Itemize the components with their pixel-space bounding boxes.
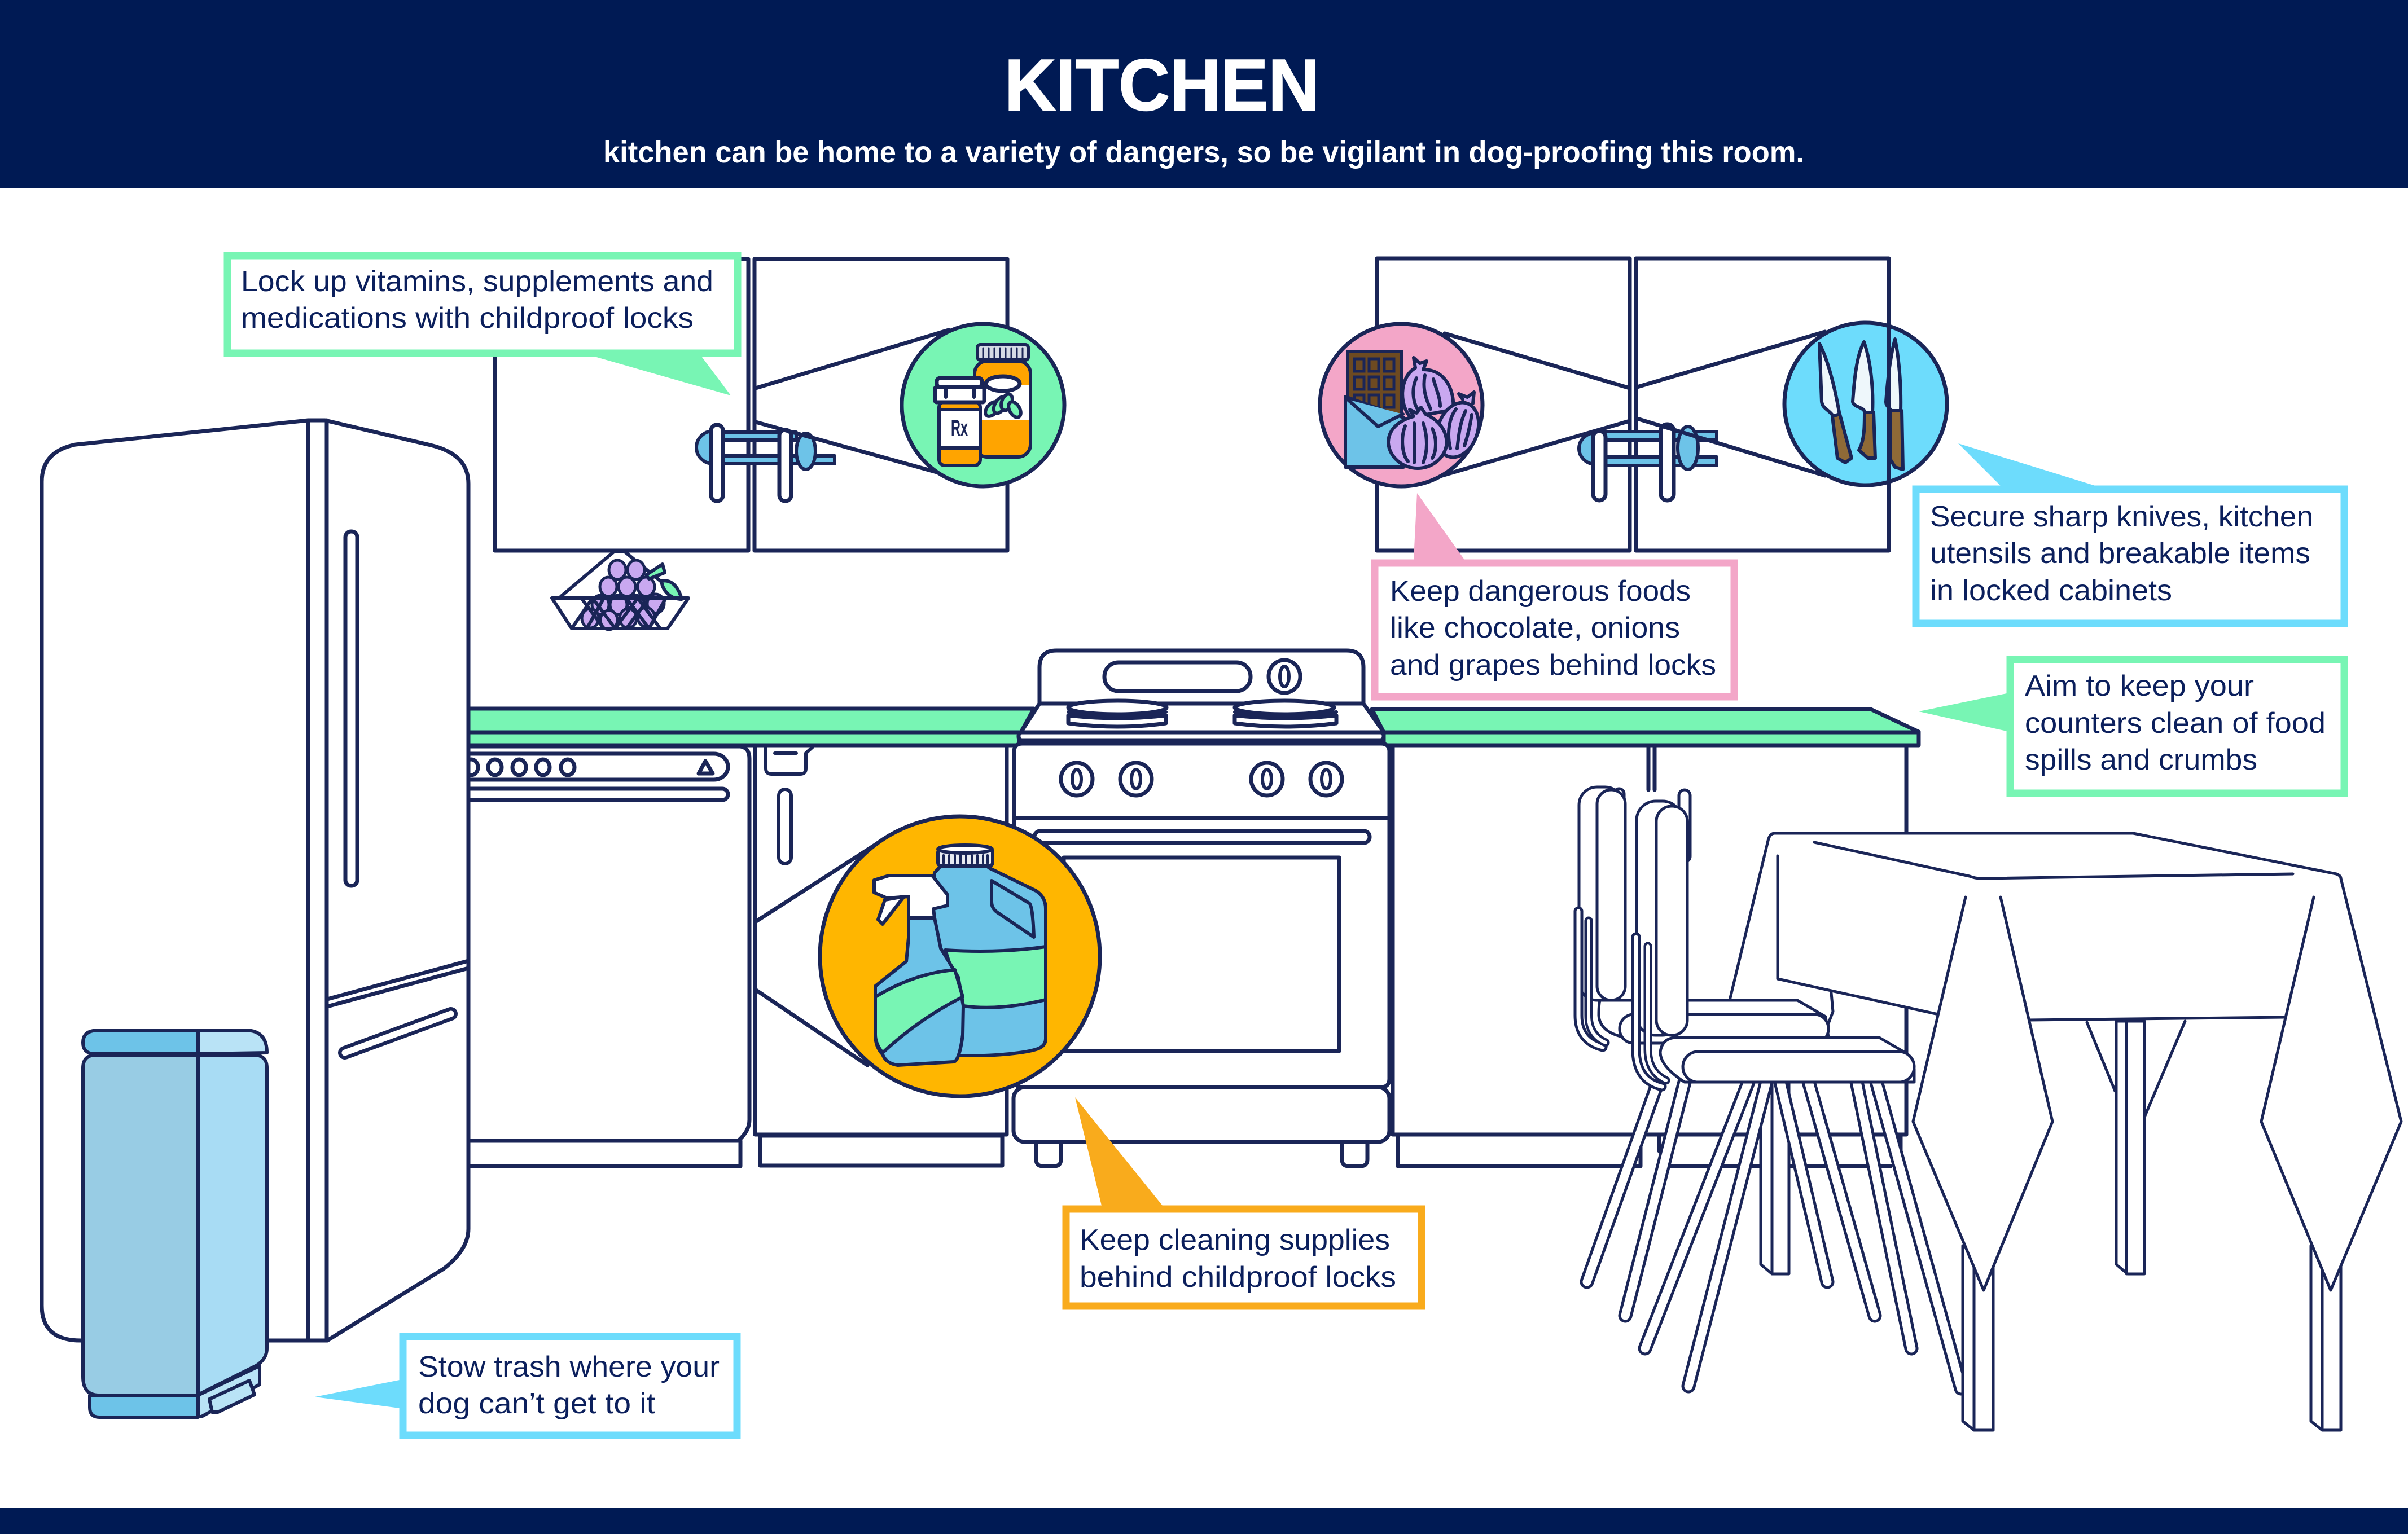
spray bottle bbox=[874, 876, 963, 1065]
stove bbox=[1014, 650, 1389, 1166]
front chair bbox=[1636, 790, 1914, 1087]
stool legs bbox=[1587, 1082, 1961, 1388]
table legs bbox=[2087, 1021, 2341, 1430]
callout: sharp knives: utensils and breakable items bbox=[1930, 537, 2310, 570]
callout: sharp knives bbox=[1916, 443, 2344, 623]
callout: counters bbox=[1919, 660, 2344, 793]
freezer handle bbox=[345, 1014, 451, 1053]
callout: lock up vitamins: medications with childproof locks bbox=[241, 302, 694, 335]
callout: trash: dog can’t get to it bbox=[418, 1387, 656, 1420]
small Rx bottle bbox=[935, 378, 984, 465]
callout: dangerous foods: Keep dangerous foods bbox=[1390, 575, 1691, 608]
callout: sharp knives: Secure sharp knives, kitchen bbox=[1930, 500, 2313, 533]
callout: dangerous foods: and grapes behind locks bbox=[1390, 649, 1716, 682]
basket frame bbox=[552, 598, 688, 628]
zoom lines: medications bbox=[756, 330, 949, 475]
callout: dangerous foods bbox=[1375, 493, 1734, 697]
backguard bbox=[1039, 650, 1363, 704]
callout: counters: spills and crumbs bbox=[2025, 744, 2257, 776]
tablecloth front drape and front leg bbox=[1913, 897, 2052, 1430]
dishwasher bbox=[464, 746, 749, 1166]
callout: trash: Stow trash where your bbox=[418, 1351, 720, 1383]
callout: cleaning supplies: Keep cleaning supplies bbox=[1080, 1224, 1390, 1256]
sink cabinet bbox=[755, 746, 1007, 1166]
childproof lock right bbox=[1579, 424, 1717, 500]
knobs bbox=[1061, 763, 1342, 795]
cooktop bbox=[1019, 701, 1384, 740]
counter right bbox=[1372, 709, 1919, 745]
fridge bbox=[42, 420, 468, 1340]
icon: knives circle bbox=[1784, 323, 1947, 485]
drawer and feet bbox=[1014, 1087, 1389, 1166]
counter left bbox=[468, 709, 1034, 745]
door edge through circle bbox=[1887, 324, 1891, 484]
callout: trash bbox=[315, 1337, 737, 1435]
lid bbox=[83, 1031, 198, 1054]
childproof lock left bbox=[696, 425, 835, 501]
grapes bbox=[582, 560, 664, 630]
back chair bbox=[1578, 787, 1828, 1047]
upper cabinets right bbox=[1377, 258, 1889, 551]
knife one bbox=[1819, 344, 1852, 463]
callout: cleaning supplies bbox=[1066, 1097, 1422, 1306]
icon: medication bottles circle bbox=[902, 324, 1064, 486]
subtitle: kitchen can be home to a variety of dangers, so be vigilant in dog-proofing this room. bbox=[603, 135, 1804, 169]
oven body bbox=[1014, 744, 1389, 1087]
pedal bbox=[209, 1381, 255, 1412]
onion back bbox=[1402, 358, 1453, 417]
small Rx bottle: Rx bbox=[951, 416, 968, 441]
trash can bbox=[83, 1031, 267, 1417]
footer band bbox=[0, 1508, 2408, 1534]
right lower cabinets bbox=[1393, 746, 1906, 1166]
knife three bbox=[1886, 339, 1903, 469]
large bottle bbox=[975, 345, 1030, 457]
tablecloth bbox=[1730, 833, 2401, 1290]
callout: counters: counters clean of food bbox=[2025, 707, 2326, 740]
knife two bbox=[1853, 342, 1875, 458]
callout: lock up vitamins: Lock up vitamins, supplements and bbox=[241, 265, 713, 298]
cabinet latch bbox=[766, 747, 813, 774]
table leg behind stools bbox=[1761, 1082, 1789, 1274]
callout: counters: Aim to keep your bbox=[2025, 670, 2254, 702]
base bbox=[90, 1395, 198, 1417]
onion right bbox=[1429, 392, 1486, 463]
stools bbox=[1578, 787, 1961, 1388]
onion front bbox=[1388, 407, 1446, 468]
icon: chocolate and onions circle bbox=[1320, 324, 1486, 486]
upper cabinets left bbox=[495, 259, 1007, 551]
control panel bbox=[464, 754, 728, 780]
fruit basket with grapes bbox=[552, 551, 688, 630]
callout: lock up vitamins bbox=[227, 256, 738, 395]
callout: cleaning supplies: behind childproof locks bbox=[1080, 1261, 1396, 1294]
title: KITCHEN bbox=[1005, 45, 1319, 126]
wrapper bbox=[1345, 397, 1403, 467]
header banner bbox=[0, 0, 2408, 188]
zoom lines: cleaning supplies bbox=[756, 844, 876, 1065]
leaf and stem bbox=[646, 564, 682, 599]
body bbox=[83, 1055, 198, 1395]
callout: sharp knives: in locked cabinets bbox=[1930, 574, 2172, 607]
icon: cleaning supplies circle bbox=[820, 816, 1100, 1096]
callout: dangerous foods: like chocolate, onions bbox=[1390, 612, 1680, 644]
chocolate bar bbox=[1348, 351, 1402, 415]
zoom lines: foods and knives bbox=[1436, 332, 1825, 477]
jug bbox=[926, 845, 1046, 1056]
fridge handle bbox=[345, 531, 357, 886]
